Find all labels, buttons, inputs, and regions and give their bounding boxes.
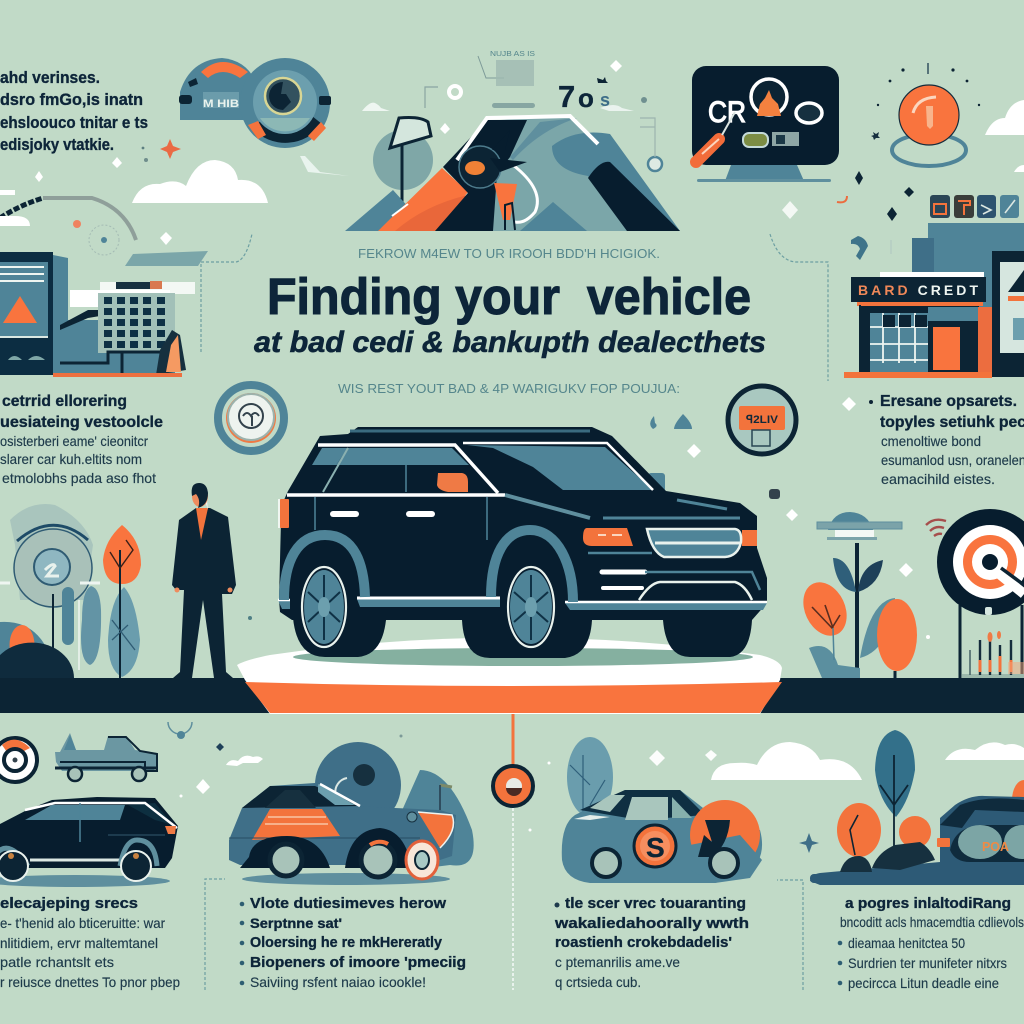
text block: bottom column 2: Serptnne sat' (250, 915, 342, 931)
title: Finding your vehicle (267, 268, 751, 325)
illustration: main SUV (278, 427, 767, 658)
icon: orange ball on ring (871, 63, 980, 166)
text block: bottom column 1: nlitidiem, ervr maltemtanel (0, 935, 158, 951)
text block: bottom column 1: elecajeping srecs (0, 895, 138, 912)
ground band (0, 678, 1024, 713)
illustration: scene with trees and car (799, 730, 1024, 885)
text block: bottom column 3: roastienh crokebdadelis' (555, 934, 732, 951)
text block: bottom column 3 (554, 895, 749, 990)
text block: bottom column 2: Biopeners of imoore 'pmeciig (250, 954, 466, 971)
text block: left middle: etmolobhs pada aso fhot (2, 470, 156, 486)
text block: bottom column 2: Saiviing rsfent naiao icookle! (250, 974, 426, 990)
text block: left middle: uesiateing vestoolcle (0, 414, 163, 431)
icon: small target bottom left (0, 738, 37, 782)
cloud: small faint (300, 156, 349, 176)
icons: small marks above car (650, 414, 780, 499)
illustration: right plants (786, 509, 930, 678)
text block: bottom column 4 (838, 895, 1024, 991)
decorative sparks (782, 171, 914, 221)
illustration: dealership: BARD CREDT (858, 282, 978, 298)
small label: top: NUJB AS IS (490, 51, 535, 58)
label: 70s (558, 60, 634, 114)
icon: speed gauges (179, 58, 331, 148)
subtitle: large: at bad cedi & bankupth dealecthets (254, 326, 766, 359)
illustration: teal car with orange panel (229, 734, 474, 885)
text block: bottom column 1: e- t'henid alo bticeruitte: war (0, 915, 165, 931)
text block: left middle: osisterberi eame' cieonitcr (0, 433, 148, 449)
icon: right medallion (728, 386, 796, 454)
text block: bottom column 4: a pogres inlaltodiRang (845, 895, 1011, 912)
icon: speed gauges: M HIB (203, 98, 239, 110)
label: 70s: 7 (558, 79, 575, 114)
text block: bottom column 4: Surdrien ter munifeter nitxrs (848, 955, 1007, 971)
text block: bottom column 4: dieamaa henitctea 50 (848, 935, 965, 951)
text block: left middle: slarer car kuh.eltits nom (0, 451, 142, 467)
text block: left middle: cetrrid ellorering (2, 393, 127, 410)
text block: bottom column 3: tle scer vrec touaranting (565, 895, 746, 912)
icon: pendulum ring (640, 97, 662, 171)
subtitle: small top: FEKROW M4EW TO UR IROOH BDD'H HCIGIOK. (358, 246, 660, 261)
text block: top left (0, 68, 148, 154)
decorative diamonds (528, 750, 717, 832)
icon: left medallion (218, 385, 284, 451)
label: 70s: s (600, 90, 610, 110)
cloud: right edge (1014, 165, 1024, 172)
platform (237, 638, 782, 714)
text block: right middle: Eresane opsarets. (880, 393, 1017, 410)
illustration: mountain road panel (345, 115, 680, 231)
text block: right middle (842, 393, 1024, 487)
text block: bottom column 2: Oloersing he re mkHereratly (250, 934, 443, 951)
text block: bottom column 2 (240, 895, 466, 990)
small label: top (478, 51, 535, 108)
text block: bottom column 2: Vlote dutiesimeves herow (250, 895, 446, 912)
text block: bottom column 3: q crtsieda cub. (555, 974, 641, 990)
cloud: top right (985, 100, 1024, 135)
icon: monitor with CRO (692, 66, 839, 182)
text block: top left: edisjoky vtatkie. (0, 135, 114, 154)
icon: bottom connector medallion (493, 714, 533, 990)
illustration: teal sedan with dollar badge (562, 737, 762, 883)
text block: bottom column 1: r reiusce dnettes To pnor pbep (0, 974, 180, 990)
illustration: left billboard and building (0, 190, 208, 377)
illustration: pickup truck (55, 722, 263, 798)
illustration: teal sedan with dollar badge: S (646, 832, 665, 863)
text block: top left: dsro fmGo,is inatn (0, 90, 143, 109)
text block: left middle (0, 393, 163, 486)
illustration: scene with trees and car: POA (982, 839, 1010, 854)
icon: target with arrow (926, 509, 1024, 678)
text block: bottom column 1: patle rchantslt ets (0, 954, 114, 970)
text block: bottom column 3: c ptemanrilis ame.ve (555, 954, 680, 970)
label: 70s: o (578, 83, 594, 113)
icon: monitor with CRO: CR (708, 96, 746, 129)
illustration: dealership (844, 223, 1024, 378)
subtitle: tagline: WIS REST YOUT BAD & 4P WARIGUKV FOP POUJUA: (338, 381, 680, 396)
cloud: top left (132, 160, 268, 203)
text block: bottom column 4: pecircca Litun deadle eine (848, 975, 999, 991)
icon: four small tiles (930, 195, 1019, 218)
figure: man in suit (172, 483, 252, 678)
text block: right middle: eamacihild eistes. (881, 471, 995, 487)
illustration: left trees (0, 504, 141, 678)
text block: top left: ahd verinses. (0, 68, 100, 87)
cloud: bottom center (711, 742, 862, 780)
text block: bottom column 3: wakaliedahoorally wwth (554, 915, 749, 932)
text block: right middle: cmenoltiwe bond (881, 433, 981, 449)
illustration: black SUV left (0, 797, 178, 887)
text block: bottom column 1 (0, 895, 180, 990)
text block: top left: ehsloouco tnitar e ts (0, 113, 148, 132)
icon: right medallion: ꟼ2LIV (746, 414, 779, 426)
icon: tiny signpost and ring (362, 86, 461, 134)
icon: spark and dots (35, 139, 181, 182)
